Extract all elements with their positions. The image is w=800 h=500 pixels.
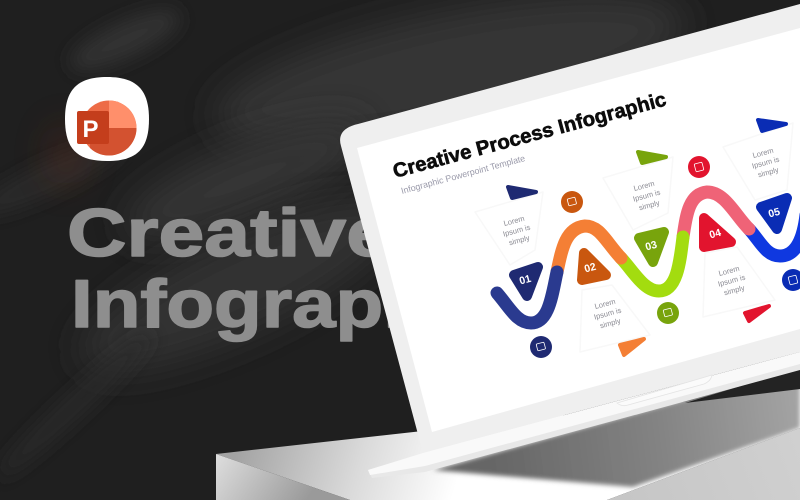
laptop lid frame [340,4,800,453]
flag red [745,306,769,321]
caption 4: Ipsum is [717,273,746,289]
icon: red circle [688,156,710,178]
caption 5: simply [757,165,780,179]
icon: blue circle [782,269,800,291]
caption 1: Lorem [503,214,525,228]
step triangles [514,198,787,296]
icon circles [530,156,800,358]
flag orange [620,339,644,355]
heading: Creative Infographic [67,195,496,342]
triangle 01 [514,267,538,296]
heading: Creative Infographic: Infographic [71,266,496,342]
caption 1: simply [508,233,531,247]
heading: Creative Infographic: Creative [67,195,392,271]
step numbers [518,206,782,287]
segment: pink [683,192,749,237]
segment: orange [557,226,621,272]
caption 2: Lorem [594,297,616,311]
slide subtitle: Infographic Powerpoint Template [400,153,526,196]
step numbers: 01 [518,273,533,287]
slide title: Creative Process Infographic [391,89,669,183]
flag navy [508,187,536,198]
flag blue [758,120,786,131]
triangle 02 [582,253,606,280]
caption 3: Ipsum is [632,188,661,204]
laptop notch [617,375,712,406]
caption 4: Lorem [718,264,740,278]
icon: PowerPoint logo [65,77,149,161]
triangle 04 [704,218,731,247]
caption 2: simply [599,316,622,330]
caption 3: simply [638,198,661,212]
caption 5: Lorem [752,146,774,160]
step numbers: 03 [644,239,659,253]
triangle 03 [639,232,664,262]
icon: navy circle [530,336,552,358]
step numbers: 04 [708,227,723,241]
icon: green circle [657,302,679,324]
step numbers: 02 [583,261,598,275]
triangle 05 [761,198,787,229]
icon letter: P [82,116,99,143]
icon: orange circle [561,191,583,213]
caption 5: Ipsum is [751,155,780,171]
flag green [638,152,666,163]
flags [508,120,786,355]
segment: navy [497,272,557,323]
pedestal [216,368,800,500]
segment: lime [621,237,683,291]
wave path [497,192,800,323]
caption 4: simply [723,283,746,297]
caption 2: Ipsum is [593,306,622,322]
card captions [499,145,783,331]
step numbers: 05 [767,206,782,220]
laptop [340,4,800,478]
caption 3: Lorem [633,179,655,193]
laptop base [368,352,800,478]
caption 1: Ipsum is [502,223,531,239]
laptop screen [357,28,800,432]
segment: blue [749,215,800,256]
step cards [475,123,793,352]
